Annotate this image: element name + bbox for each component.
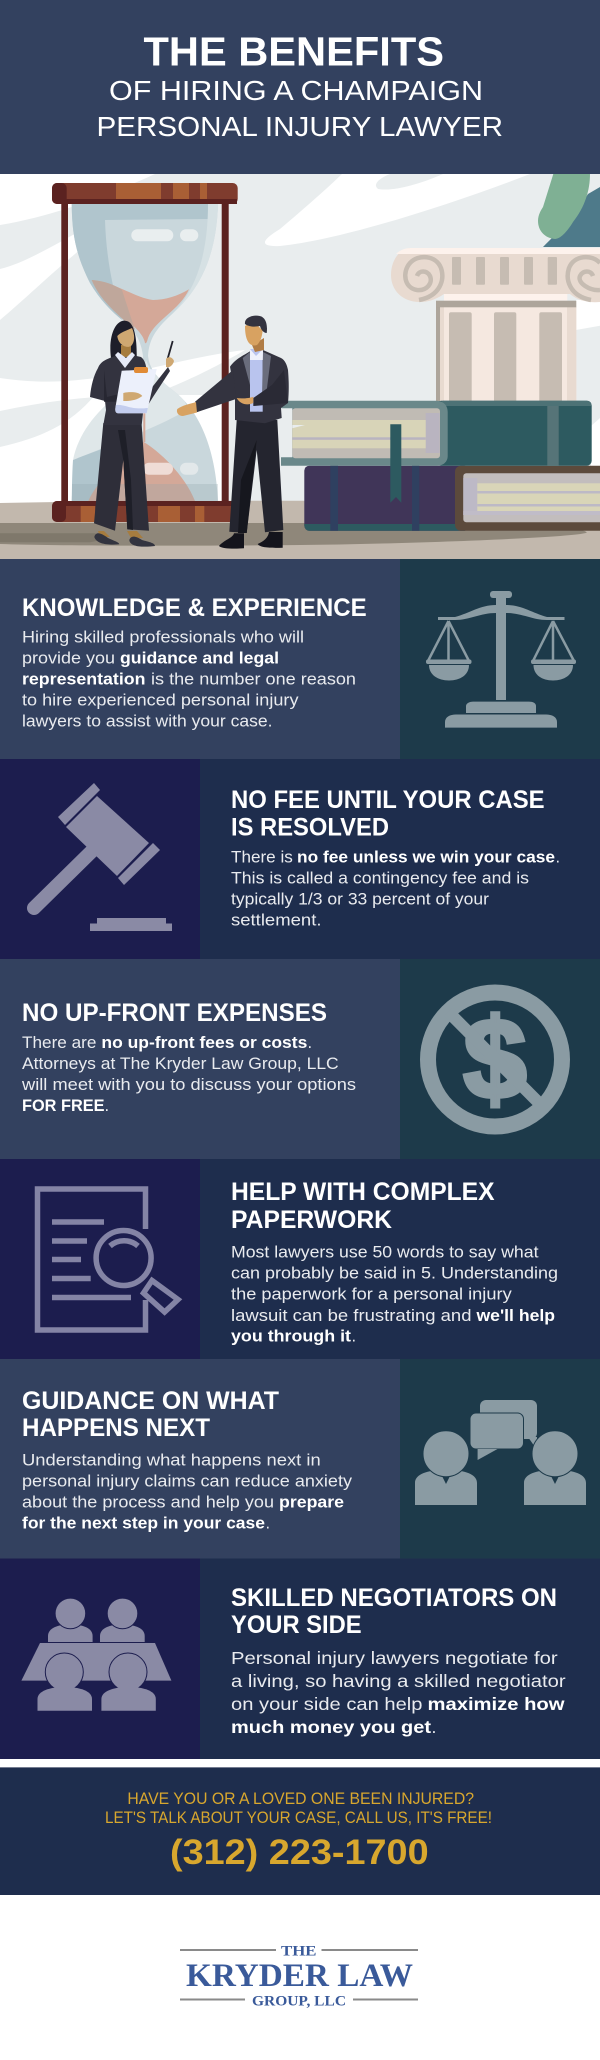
heading: SKILLED NEGOTIATORS ON [231, 1584, 557, 1612]
body text: no up-front fees or costs [101, 1034, 307, 1052]
heading: HAPPENS NEXT [22, 1414, 210, 1442]
body text [22, 628, 356, 730]
heading [22, 1387, 279, 1442]
body text: a living, so having a skilled negotiator [231, 1671, 566, 1691]
icon: gavel [34, 783, 172, 931]
panel: no up-front expenses [0, 959, 600, 1159]
heading: PAPERWORK [231, 1206, 392, 1234]
body text: settlement. [231, 912, 322, 930]
body text: prepare [279, 1494, 344, 1512]
body text: . [352, 1327, 356, 1345]
body text: There are [22, 1034, 96, 1052]
body text: for the next step in your case [22, 1514, 265, 1532]
heading: GUIDANCE ON WHAT [22, 1387, 279, 1415]
hourglass [52, 183, 238, 522]
call to action text: HAVE YOU OR A LOVED ONE BEEN INJURED? [127, 1790, 474, 1808]
logo: THE [281, 1944, 316, 1960]
body text: to hire experienced personal injury [22, 691, 299, 709]
icon: no dollar sign: $ [463, 996, 527, 1123]
body text: There is [231, 848, 293, 866]
heading: KNOWLEDGE & EXPERIENCE [22, 594, 367, 622]
heading [231, 1584, 557, 1639]
body text: you through it [231, 1327, 352, 1345]
hero illustration [0, 174, 600, 560]
frame [61, 203, 68, 502]
body text: will meet with you to discuss your options [21, 1076, 356, 1094]
body text [231, 848, 560, 930]
glass [72, 204, 218, 502]
floor [0, 501, 600, 560]
body text: Understanding what happens next in [22, 1452, 321, 1470]
title [96, 28, 503, 142]
body text: Most lawyers use 50 words to say what [231, 1244, 539, 1262]
body text: personal injury claims can reduce anxiety [22, 1472, 353, 1490]
body text: Attorneys at The Kryder Law Group, LLC [22, 1055, 339, 1073]
body text [231, 1648, 566, 1737]
body text: . [104, 1097, 109, 1115]
icon: meeting table with people [21, 1598, 171, 1711]
body text [21, 1034, 356, 1115]
title: OF HIRING A CHAMPAIGN [109, 75, 483, 106]
logo: KRYDER LAW [186, 1958, 413, 1994]
heading: HELP WITH COMPLEX [231, 1178, 495, 1206]
body text: much money you get [231, 1717, 431, 1737]
body text: This is called a contingency fee and is [231, 869, 529, 887]
body text: . [556, 848, 560, 866]
stacked books [281, 401, 600, 531]
sand [72, 280, 218, 501]
title: THE BENEFITS [144, 28, 444, 74]
woman figure [90, 321, 174, 547]
panel: knowledge and experience [0, 559, 600, 759]
body text: about the process and help you [22, 1494, 274, 1512]
body text: Hiring skilled professionals who will [22, 628, 304, 646]
icon: no dollar sign [428, 992, 562, 1126]
body text: is the number one reason [151, 670, 356, 688]
body text: lawsuit can be frustrating and [231, 1307, 472, 1325]
body text: provide you [22, 649, 115, 667]
column [391, 248, 600, 402]
body text: the paperwork for a personal injury [231, 1286, 513, 1304]
body text: representation [22, 670, 146, 688]
man figure [177, 316, 289, 549]
icon: scales of justice [426, 591, 576, 728]
logo: GROUP, LLC [252, 1994, 346, 2010]
heading: IS RESOLVED [231, 814, 389, 842]
heading: YOUR SIDE [231, 1611, 362, 1639]
body text: lawyers to assist with your case. [22, 712, 272, 730]
body text: typically 1/3 or 33 percent of your [231, 890, 490, 908]
logo [180, 1944, 418, 2010]
body text [231, 1244, 558, 1345]
header banner [0, 0, 600, 174]
body text: guidance and legal [120, 649, 279, 667]
body text: . [308, 1034, 312, 1052]
body text: maximize how [428, 1694, 565, 1714]
body text: on your side can help [231, 1694, 422, 1714]
heading [231, 786, 545, 842]
heading: NO UP-FRONT EXPENSES [22, 999, 327, 1027]
call to action text [105, 1790, 492, 1827]
body text: . [432, 1717, 436, 1737]
body text: we'll help [475, 1307, 555, 1325]
title: PERSONAL INJURY LAWYER [96, 111, 503, 142]
body text: no fee unless we win your case [297, 848, 555, 866]
body text [22, 1452, 353, 1532]
panel: guidance on what happens next [0, 1359, 600, 1558]
heading: NO FEE UNTIL YOUR CASE [231, 786, 545, 814]
icon: document with magnifier [38, 1189, 178, 1330]
body text: FOR FREE [22, 1097, 104, 1115]
body text: can probably be said in 5. Understanding [231, 1264, 558, 1282]
heading [231, 1178, 495, 1234]
phone number: (312) 223-1700 [170, 1833, 429, 1872]
panel: skilled negotiators [0, 1558, 600, 1759]
panel: complex paperwork [0, 1159, 600, 1359]
call to action text: LET'S TALK ABOUT YOUR CASE, CALL US, IT'S FREE! [105, 1809, 492, 1827]
plant leaves [538, 174, 600, 247]
panel: no fee until resolved [0, 759, 600, 959]
icon: people talking [415, 1400, 586, 1505]
call to action banner [0, 1767, 600, 1895]
body text: . [266, 1514, 270, 1532]
body text: Personal injury lawyers negotiate for [231, 1648, 558, 1668]
